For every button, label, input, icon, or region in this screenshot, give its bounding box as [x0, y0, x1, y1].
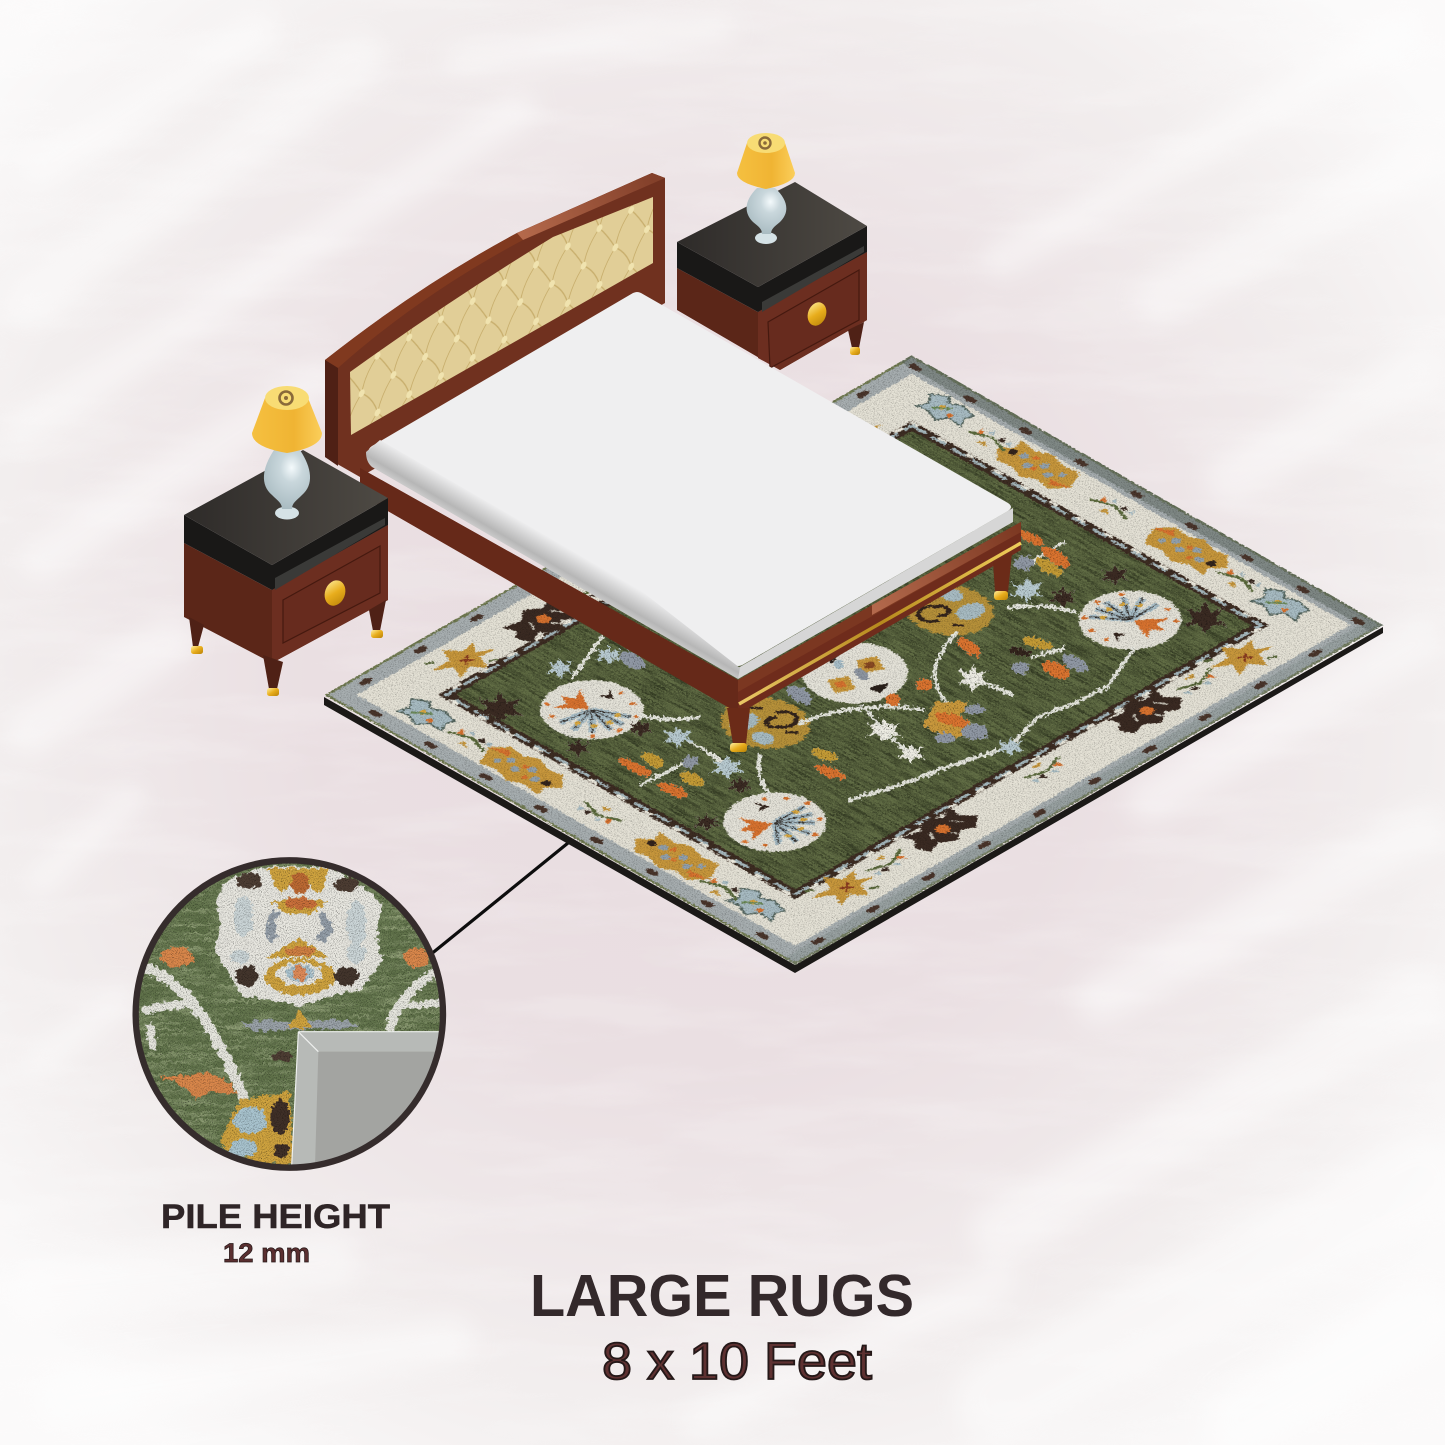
label: pile height [161, 1198, 390, 1268]
leaves and stars [476, 528, 1227, 831]
label: pile height: PILE HEIGHT [161, 1198, 390, 1236]
lamp [737, 133, 795, 244]
mattress right side [738, 508, 1013, 679]
gold strip [739, 543, 1021, 704]
title: LARGE RUGS [530, 1263, 914, 1329]
bed frame and mattress [360, 292, 1021, 752]
drawer body [677, 252, 867, 370]
drawer knob [321, 577, 349, 609]
black top [184, 450, 388, 590]
subtitle: size: 8 x 10 Feet [602, 1333, 873, 1391]
pile height value: 12 mm [223, 1238, 310, 1268]
circle ring [136, 860, 443, 1168]
nightstand with lamp: front left [184, 386, 388, 696]
connector line from rug to zoom circle [430, 843, 568, 955]
legs [189, 600, 386, 696]
mattress left side with soft shading [366, 440, 740, 679]
bed rails [360, 468, 1021, 713]
drawer body [184, 525, 388, 663]
rug: 8 x 10 feet, isometric [324, 355, 1383, 973]
rug field stems and flowers [324, 355, 1383, 965]
lamp [252, 386, 322, 520]
nightstand with lamp: back right [677, 133, 867, 370]
headboard [325, 173, 665, 477]
lighter top section [517, 173, 665, 240]
tufted panel [350, 197, 653, 435]
flower cluster [923, 702, 989, 743]
right leg [993, 553, 1012, 600]
zoom circle: pile detail [130, 850, 450, 1173]
rug surface [324, 355, 1383, 965]
drawer knob [804, 300, 830, 328]
rug edge thickness [324, 627, 1383, 973]
mattress top [368, 292, 1011, 666]
black top [677, 182, 867, 312]
lighter rail section [872, 522, 1021, 615]
front leg [727, 708, 750, 752]
back leg [848, 322, 864, 355]
folded rug back corner [291, 1031, 439, 1164]
